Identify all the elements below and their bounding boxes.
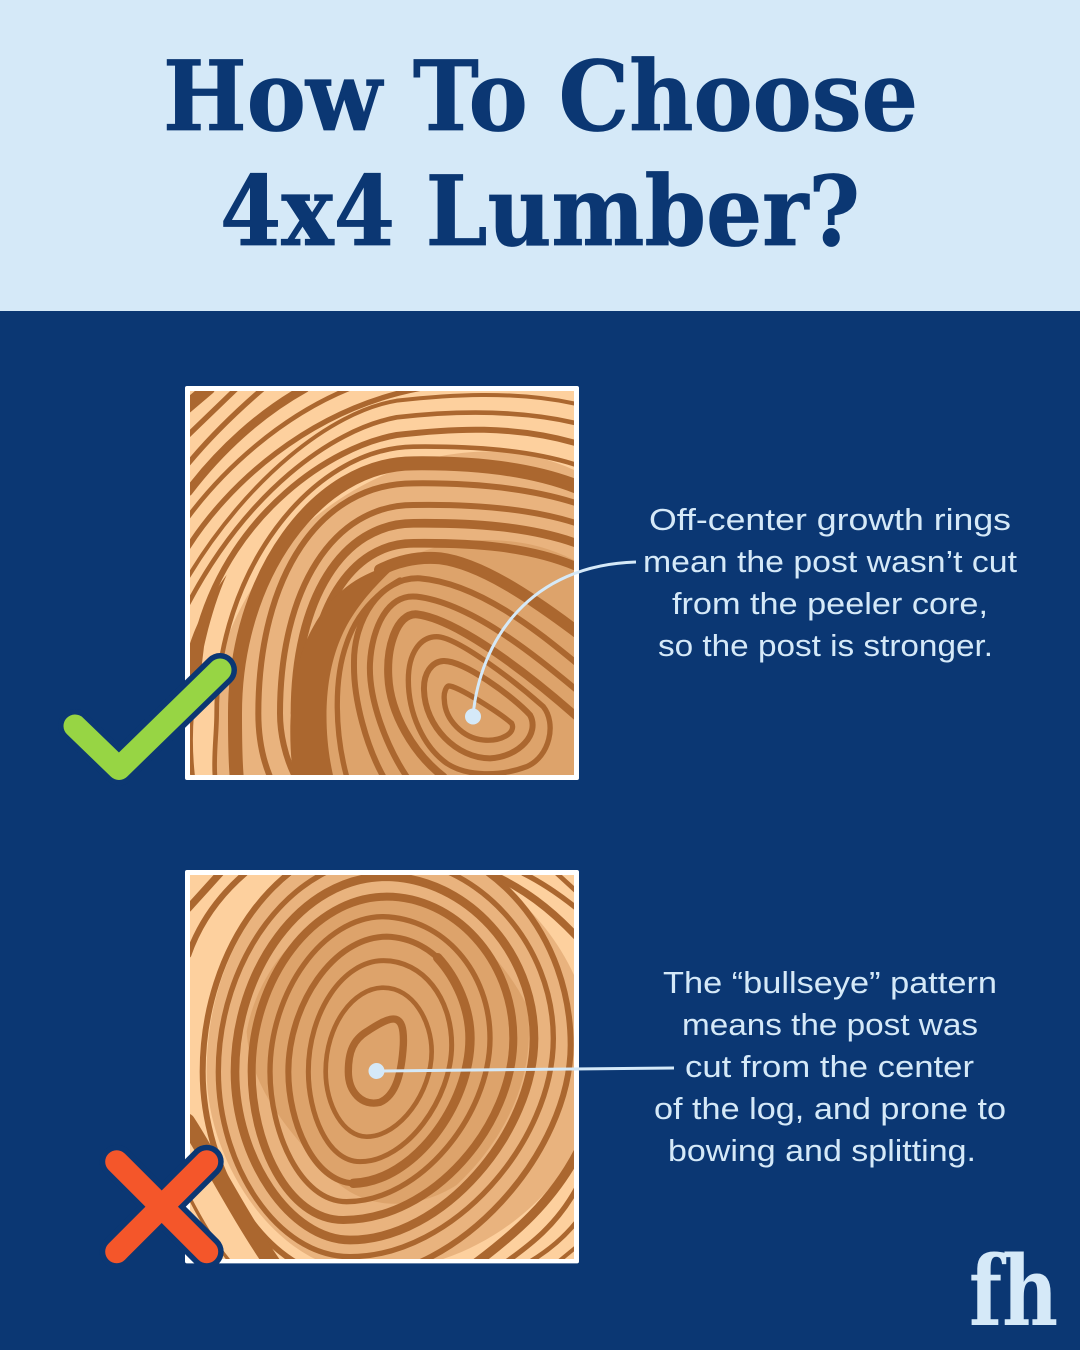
text block: bullseye explanation: cut from the center — [685, 1049, 974, 1084]
panel: bad lumber board with bullseye rings — [185, 870, 579, 1264]
callout line: bullseye center — [376, 1068, 674, 1071]
thick crescent band around the core — [290, 571, 390, 775]
text block: bullseye explanation: of the log, and prone to — [654, 1091, 1006, 1126]
text block: off-center rings explanation: from the peeler core, — [672, 586, 988, 621]
icon: orange cross mark — [117, 1162, 207, 1252]
text block: bullseye explanation: bowing and splitting. — [668, 1133, 976, 1168]
icon: green check mark — [75, 670, 220, 768]
title — [163, 40, 918, 268]
text block: bullseye explanation: means the post was — [682, 1007, 978, 1042]
title: 4x4 Lumber? — [220, 155, 860, 268]
text block: bullseye explanation — [654, 965, 1006, 1168]
callout dot: off-center core — [465, 708, 481, 724]
text block: off-center rings explanation — [643, 502, 1017, 663]
callout line: off-center rings — [473, 562, 636, 716]
header band — [0, 0, 1080, 311]
text block: bullseye explanation: The “bullseye” pattern — [663, 965, 997, 1000]
title: How To Choose — [163, 40, 918, 153]
callout dot: bullseye center — [368, 1063, 384, 1079]
text block: off-center rings explanation: mean the post wasn’t cut — [643, 544, 1017, 579]
tapered band at lower left of board — [190, 575, 227, 680]
text block: off-center rings explanation: so the post is stronger. — [658, 628, 993, 663]
text block: off-center rings explanation: Off-center growth rings — [649, 502, 1011, 537]
panel: good lumber board with off-center rings — [185, 386, 579, 780]
logo: fh: fh — [969, 1235, 1058, 1348]
